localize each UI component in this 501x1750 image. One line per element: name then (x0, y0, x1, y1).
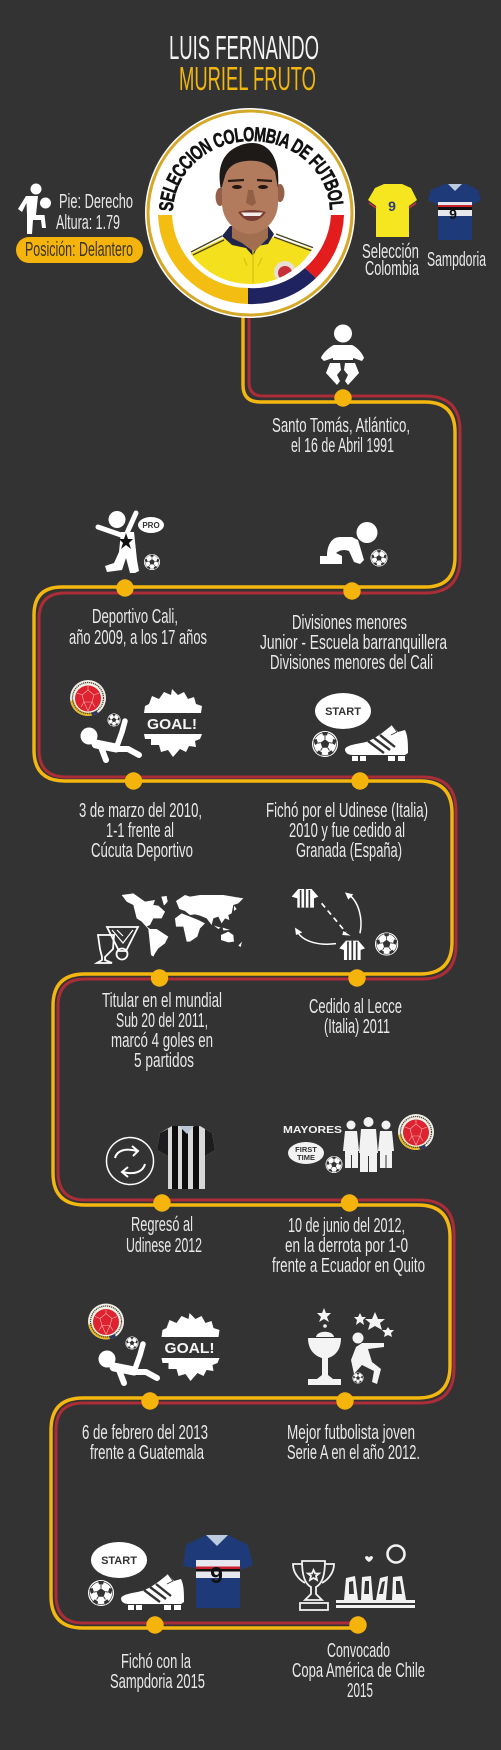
title: MURIEL FRUTO (179, 60, 316, 97)
icon: Colombia jersey (368, 184, 417, 237)
icon: first team: MAYORES (283, 1124, 342, 1136)
text: Guatemala: frente a Guatemala (90, 1441, 204, 1464)
icon: debut goal (70, 680, 202, 760)
text: sub 20: Titular en el mundial (102, 989, 222, 1012)
icon: transfer tactic (292, 889, 398, 960)
text: Sampdoria: Fichó con la (121, 1650, 191, 1673)
text: first league match (79, 799, 202, 862)
text: sub 20: Sub 20 del 2011, (116, 1009, 208, 1032)
text: first league match: Cúcuta Deportivo (91, 839, 193, 862)
icon: Sampdoria jersey (428, 184, 481, 240)
text: Sampdoria: Sampdoria 2015 (110, 1670, 205, 1693)
text: Guatemala: 6 de febrero del 2013 (82, 1421, 208, 1444)
position pill (16, 237, 143, 263)
icon: cup and medal (97, 927, 138, 963)
text: Lecce: (Italia) 2011 (324, 1015, 390, 1038)
text: sub 20: marcó 4 goles en (111, 1029, 213, 1052)
text: foot and height: Pie: Derecho (59, 190, 133, 213)
icon: first team: FIRST (295, 1145, 317, 1154)
icon: world map (122, 893, 243, 957)
text: senior debut: 10 de junio del 2012, (288, 1214, 405, 1237)
text: Udinese: Granada (España) (296, 839, 402, 862)
text: Sampdoria (110, 1650, 205, 1693)
circular lettering: SELECCION COLOMBIA DE FUTBOL (158, 126, 344, 212)
icon: return arrows (106, 1138, 154, 1184)
title (169, 29, 319, 97)
text: first league match: 3 de marzo del 2010, (79, 799, 202, 822)
icon: trophy and best player (308, 1308, 394, 1385)
timeline dots (116, 389, 369, 1634)
icon: baby (321, 324, 364, 385)
text: Copa America (292, 1639, 425, 1702)
position pill: Posición: Delantero (25, 238, 133, 261)
icon: first team (283, 1114, 434, 1173)
text: Copa America: 2015 (347, 1679, 373, 1702)
text: best young player: Serie A en el año 2012. (287, 1441, 420, 1464)
icon: first team: TIME (297, 1153, 315, 1162)
icon: start boot Sampdoria: START (101, 1555, 137, 1567)
text: first league match: 1-1 frente al (106, 819, 174, 842)
text: Udinese (266, 799, 428, 862)
icon: player with ball (18, 184, 51, 234)
text: jersey labels (362, 240, 486, 280)
text: foot and height (56, 190, 133, 234)
timeline path (34, 317, 460, 1628)
text: Copa America: Copa América de Chile (292, 1659, 425, 1682)
icon: Udinese jersey (157, 1126, 215, 1189)
icon: Copa America trophy (293, 1561, 334, 1610)
icon: team and ball (336, 1546, 415, 1608)
icon: Guatemala goal (88, 1304, 220, 1383)
text: jersey labels: Selección (362, 240, 419, 263)
icon: start boot (312, 693, 408, 761)
text: Guatemala (82, 1421, 208, 1464)
icon: crawling baby (320, 522, 388, 566)
text: divisiones menores (260, 611, 447, 674)
text: Udinese: 2010 y fue cedido al (289, 819, 405, 842)
text: birth (272, 414, 410, 457)
icon: Sampdoria jersey large: 9 (210, 1562, 223, 1588)
icon: start boot Sampdoria (88, 1542, 184, 1610)
icon: pro player (98, 511, 164, 573)
title: LUIS FERNANDO (169, 29, 319, 66)
text: Deportivo Cali (69, 605, 207, 649)
text: senior debut: frente a Ecuador en Quito (272, 1254, 425, 1277)
icon: debut goal: GOAL! (147, 716, 197, 733)
icon: start boot: START (325, 706, 361, 718)
text: return to Udinese (126, 1213, 202, 1257)
text: Lecce (309, 995, 402, 1038)
text: divisiones menores: Divisiones menores (292, 611, 407, 634)
text: return to Udinese: Udinese 2012 (126, 1234, 202, 1257)
text: birth: el 16 de Abril 1991 (291, 434, 394, 457)
text: foot and height: Altura: 1.79 (56, 211, 120, 234)
text: sub 20 (102, 989, 222, 1072)
text: Lecce: Cedido al Lecce (309, 995, 402, 1018)
text: senior debut: en la derrota por 1-0 (285, 1234, 408, 1257)
rim arcs: yellow, blue, red (158, 215, 344, 304)
icon: pro player: PRO (142, 521, 160, 530)
icon: Colombia jersey: 9 (388, 198, 396, 214)
text: jersey labels: Colombia (365, 257, 419, 280)
text: senior debut (272, 1214, 425, 1277)
text: best young player (287, 1421, 420, 1464)
icon: Guatemala goal: GOAL! (164, 1340, 214, 1357)
text: Deportivo Cali: Deportivo Cali, (92, 605, 178, 628)
text: return to Udinese: Regresó al (131, 1213, 193, 1236)
icon: Sampdoria jersey large (183, 1535, 253, 1608)
medallion with portrait (145, 108, 355, 318)
icon: Sampdoria jersey: 9 (449, 206, 457, 222)
text: birth: Santo Tomás, Atlántico, (272, 414, 410, 437)
text: sub 20: 5 partidos (134, 1049, 194, 1072)
text: Deportivo Cali: año 2009, a los 17 años (69, 626, 207, 649)
portrait photo (190, 143, 314, 284)
text: Copa America: Convocado (327, 1639, 390, 1662)
text: best young player: Mejor futbolista joven (287, 1421, 415, 1444)
